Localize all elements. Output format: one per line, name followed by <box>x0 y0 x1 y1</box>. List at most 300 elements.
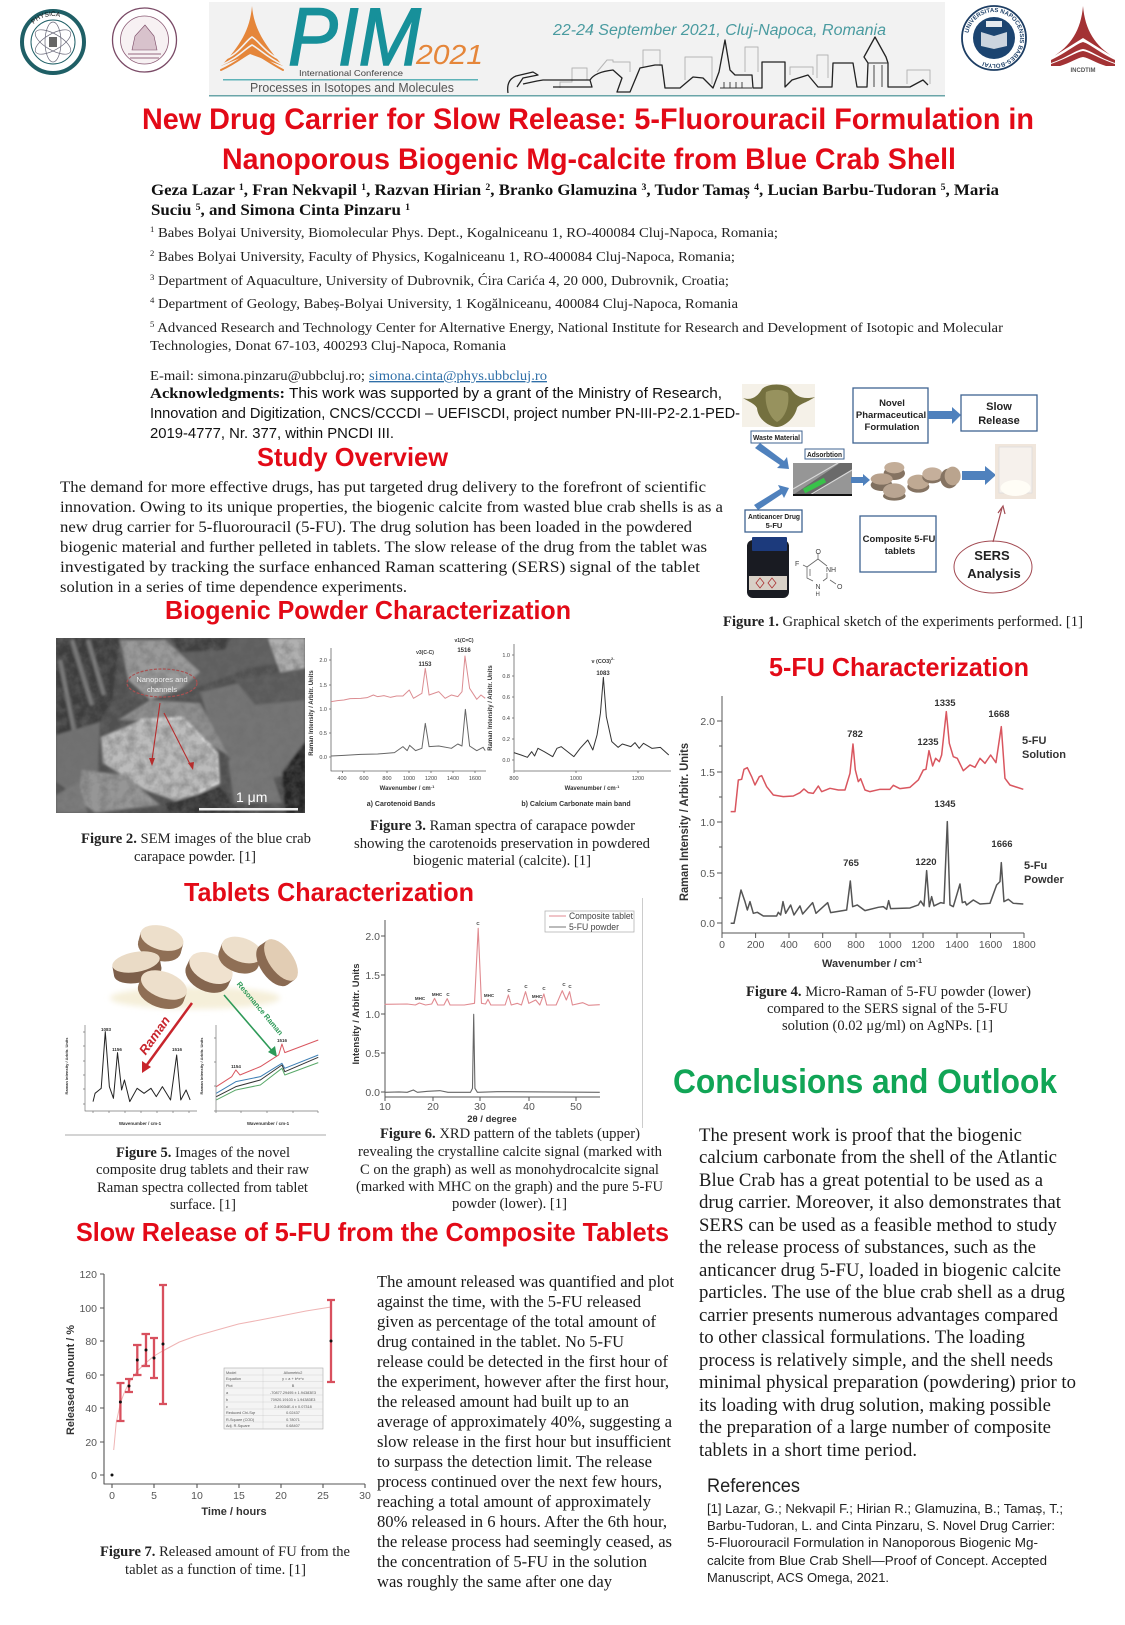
caption: figure 5: Figure 5. Images of the novel <box>116 1145 290 1161</box>
figure 3a: carotenoid Raman chart: 1600 <box>469 776 481 782</box>
banner text: 2021: 2021 <box>415 39 483 70</box>
heading: 5-FU Characterization: 5-FU Characterization <box>769 652 1029 682</box>
table: fit parameters <box>224 1368 323 1429</box>
affiliations: 5 <box>150 320 154 329</box>
figure 7: release chart: 40 <box>85 1403 97 1415</box>
image: SEM with green drug rod <box>793 463 852 496</box>
logo: Physica: PHYSICA <box>31 11 60 24</box>
text: study overview paragraph: new drug carrier for 5-fluorouracil (5-FU). The drug solution has been loaded in the powdered <box>60 519 692 536</box>
authors: 5 <box>196 202 201 212</box>
figure 4: 5-FU Raman chart: 1400 <box>945 939 969 951</box>
figure 6: XRD chart: C <box>507 988 511 993</box>
figure 3a: carotenoid Raman chart: 1000 <box>403 776 415 782</box>
figure 4: 5-FU Raman chart: 765 <box>843 858 860 869</box>
caption: figure 4: compared to the SERS signal of the 5-FU <box>767 1001 1009 1017</box>
chart: tablet Raman spectrum: Wavenumber / cm-1 <box>119 1121 162 1126</box>
logo: INCDTIM <box>1051 6 1115 74</box>
text: conclusions paragraph: calcium carbonate from the shell of the Atlantic <box>699 1148 1057 1168</box>
title <box>142 103 1034 176</box>
authors: 1 <box>405 202 411 212</box>
figure 3a: carotenoid Raman chart: ν1(C=C) <box>454 638 474 644</box>
figure 6: XRD chart: MHC <box>532 994 543 999</box>
figure 6: XRD chart: MHC <box>432 992 443 997</box>
text: study overview paragraph: The demand for more effective drugs, has put targeted drug delivery to the forefront of scientific <box>60 479 706 496</box>
figure 3a: carotenoid Raman chart: 1.0 <box>319 707 327 713</box>
figure 4: 5-FU Raman chart: 1000 <box>878 939 902 951</box>
box: Composite 5-FU tablets: tablets <box>885 546 915 557</box>
box: Novel Pharmaceutical Formulation: Pharmaceutical <box>856 410 926 421</box>
figure 3b: calcium carbonate chart: 1200 <box>632 776 644 782</box>
callout: nanopores label: Nanopores and <box>136 675 188 684</box>
figure 7: release chart <box>65 1269 371 1518</box>
figure 4: 5-FU Raman chart: 1600 <box>979 939 1002 951</box>
chart: resonance Raman spectra: Raman Intensity / Arbitr. Units <box>199 1037 204 1094</box>
text: reference list: Barbu-Tudoran, L. and Cinta Pinzaru, S. Novel Drug Carrier: <box>707 1518 1055 1533</box>
heading: Slow Release: Slow Release of 5-FU from the Composite Tablets <box>76 1217 669 1247</box>
caption: figure 6: revealing the crystalline calcite signal (marked with <box>358 1144 663 1160</box>
figure 4: 5-FU Raman chart: 1.5 <box>700 767 715 779</box>
text: conclusions paragraph <box>699 1126 1076 1461</box>
box: Adsorbtion: Adsorbtion <box>807 452 842 459</box>
figure 3b: calcium carbonate chart: 1000 <box>570 776 582 782</box>
caption: figure 5: surface. [1] <box>170 1197 236 1213</box>
box: Slow Release: Release <box>978 415 1020 427</box>
text: conclusions paragraph: particles. The use of the blue crab shell as a drug <box>699 1283 1065 1303</box>
figure 4: 5-FU Raman chart: 1.0 <box>700 817 715 829</box>
text: release description: slow release in the first hour but insufficient <box>377 1432 671 1451</box>
text: release description <box>377 1272 674 1591</box>
series: 5-FU powder <box>731 822 1023 923</box>
box: Novel Pharmaceutical Formulation <box>853 388 928 443</box>
figure 4: 5-FU Raman chart: 5-FU <box>1022 735 1046 747</box>
figure 6: XRD chart: 1.5 <box>365 970 380 982</box>
figure 3a: carotenoid Raman chart: 600 <box>359 776 369 782</box>
figure 3a: carotenoid Raman chart: 1153 <box>418 662 432 668</box>
text: conclusions paragraph: SERS can be used as a feasible method to study <box>699 1216 1058 1236</box>
figure 6: XRD chart: 2.0 <box>365 931 380 943</box>
affiliations: Technologies, Donat 67-103, 400293 Cluj-Napoca, Romania <box>150 338 506 353</box>
caption: figure 7 <box>100 1544 350 1578</box>
figure 6: XRD chart <box>351 898 642 1128</box>
figure 4: 5-FU Raman chart <box>679 696 1066 970</box>
contact email: E-mail: simona.pinzaru@ubbcluj.ro; <box>150 368 365 383</box>
figure 4: 5-FU Raman chart: 1220 <box>915 857 937 868</box>
caption: figure 3: showing the carotenoids preservation in powdered <box>354 836 651 852</box>
figure 3b: calcium carbonate chart: Raman Intensity / Arbitr. Units <box>488 665 494 751</box>
authors: Suciu <box>151 202 188 219</box>
affiliations: Department of Geology, Babeș-Bolyai University, 1 Kogălniceanu, 400084 Cluj-Napoca, Romania <box>154 296 738 311</box>
affiliations <box>150 225 1004 353</box>
authors: 1 <box>361 182 367 192</box>
table: fit parameters: Adj. R-Square <box>226 1424 250 1428</box>
caption: figure 3: Figure 3. Raman spectra of carapace powder <box>370 818 635 834</box>
authors: 3 <box>641 182 647 192</box>
figure 3b: calcium carbonate chart: -1 <box>616 784 620 789</box>
title: Nanoporous Biogenic Mg-calcite from Blue Crab Shell <box>222 143 956 176</box>
text: conclusions paragraph: anticancer drug 5-FU, loaded in biogenic calcite <box>699 1261 1061 1281</box>
arrow: SERS to jar <box>993 506 1005 542</box>
text: conclusions paragraph: drug carrier. Moreover, it also demonstrates that <box>699 1193 1062 1213</box>
series: fit curve <box>114 1307 331 1450</box>
series: error bars <box>116 1285 335 1421</box>
figure 6: XRD chart: 10 <box>379 1101 391 1113</box>
figure 4: 5-FU Raman chart: 800 <box>847 939 865 951</box>
text: conclusions paragraph: minimal physical preparation (powdering) prior to <box>699 1373 1076 1393</box>
banner icon: orange tent <box>221 6 283 70</box>
caption: figure 7: tablet as a function of time. [1] <box>125 1562 306 1578</box>
figure 4: 5-FU Raman chart: 1345 <box>934 799 956 810</box>
figure 3b: calcium carbonate chart: 0.0 <box>502 758 510 764</box>
contact email <box>150 368 547 383</box>
table: fit parameters: 70920.19103 ± 1.94383E3 <box>271 1398 315 1402</box>
caption: figure 4: solution (0.02 μg/ml) on AgNPs. [1] <box>782 1018 993 1034</box>
figure 7: release chart: 120 <box>79 1269 97 1281</box>
text: release description: reaching a total amount of approximately <box>377 1492 652 1511</box>
figure 3a: carotenoid Raman chart: 400 <box>337 776 347 782</box>
contact email: simona.cinta@phys.ubbcluj.ro <box>369 368 547 383</box>
text: conclusions paragraph: carrier presents numerous advantages compared <box>699 1306 1059 1326</box>
acknowledgments: This work was supported by a grant of the Ministry of Research, <box>289 386 722 402</box>
text: study overview paragraph: investigated by tracking the surface enhanced Raman scattering (SERS) signal of the tablet <box>60 559 701 576</box>
caption: figure 5: composite drug tablets and their raw <box>96 1162 310 1178</box>
text: release description: drug contained in the tablet. No 5-FU <box>377 1332 624 1351</box>
figure 7: release chart: 25 <box>317 1490 329 1502</box>
figure 4: 5-FU Raman chart: Powder <box>1024 874 1064 886</box>
banner text: International Conference: International Conference <box>299 68 403 78</box>
figure 5: tablets and Raman spectra <box>64 921 318 1126</box>
figure 6: XRD chart: MHC <box>415 996 426 1001</box>
table: fit parameters: Equation <box>226 1377 241 1381</box>
text: release description: given as percentage of the total amount of <box>377 1312 656 1331</box>
figure 4: 5-FU Raman chart: 200 <box>747 939 765 951</box>
title: New Drug Carrier for Slow Release: 5-Fluorouracil Formulation in <box>142 103 1034 136</box>
figure 7: release chart: Time / hours <box>201 1506 267 1518</box>
table: fit parameters: Reduced Chi-Sqr <box>226 1411 256 1415</box>
caption: figure 2: Figure 2. SEM images of the blue crab <box>81 831 311 847</box>
figure 3b: calcium carbonate chart: 800 <box>509 776 519 782</box>
table: fit parameters: R-Square (COD) <box>226 1418 255 1422</box>
arrow: waste to adsorption <box>755 443 789 469</box>
banner text: Processes in Isotopes and Molecules: Processes in Isotopes and Molecules <box>250 81 454 95</box>
box: Slow Release: Slow <box>986 401 1012 413</box>
figure 6: XRD chart: 2θ / degree <box>467 1114 517 1125</box>
heading: Study Overview: Study Overview <box>257 442 449 472</box>
series: data points <box>110 1340 332 1476</box>
chart: resonance Raman spectra <box>199 1025 318 1126</box>
table: fit parameters: b <box>226 1398 228 1402</box>
text: release description: the experiment, however after the first hour, <box>377 1372 669 1391</box>
image: composite tablets <box>871 462 961 501</box>
figure 3a: carotenoid Raman chart: 0.5 <box>319 731 327 737</box>
diagram: 5-FU chemical structure: H <box>816 592 820 598</box>
figure 6: XRD chart: 40 <box>523 1101 535 1113</box>
text: study overview paragraph: biogenic material and further pelleted in tablets. The slow release of the drug from the tablet was <box>60 539 707 556</box>
figure 6: XRD chart: 50 <box>570 1101 582 1113</box>
affiliations: Advanced Research and Technology Center for Alternative Energy, National Institute for Research and Development of Isotopic and Molecular <box>154 320 1004 335</box>
callout: SERS Analysis: Analysis <box>967 566 1021 581</box>
figure 6: XRD chart: C <box>542 986 546 991</box>
figure 4: 5-FU Raman chart: Raman Intensity / Arbitr. Units <box>679 743 691 901</box>
figure 3b: calcium carbonate chart: 2- <box>611 656 615 661</box>
text: release description: the release process had seemingly ceased, as <box>377 1532 672 1551</box>
figure 4: 5-FU Raman chart: 1335 <box>934 698 956 709</box>
heading: References: References <box>707 1476 800 1497</box>
authors: 2 <box>485 182 491 192</box>
callout: SERS Analysis <box>954 541 1032 593</box>
box: Anticancer Drug 5-FU <box>745 510 802 532</box>
authors: , Branko Glamuzina <box>490 182 641 199</box>
figure 3a: carotenoid Raman chart <box>309 638 486 808</box>
legend <box>545 911 634 932</box>
text: release description: against the time, with the 5-FU released <box>377 1292 642 1311</box>
caption: figure 4: Figure 4. Micro-Raman of 5-FU powder (lower) <box>746 984 1031 1000</box>
series: 5-FU solution <box>731 712 1023 812</box>
authors: Geza Lazar <box>151 182 228 199</box>
authors: , Razvan Hirian <box>366 182 485 199</box>
figure 6: XRD chart: C <box>568 984 572 989</box>
heading: Tablets Characterization: Tablets Characterization <box>184 877 474 907</box>
chart: resonance Raman spectra: 1154 <box>231 1064 241 1069</box>
figure 1: graphical sketch <box>742 384 1037 598</box>
diagram: 5-FU chemical structure: N <box>816 584 821 591</box>
figure 3a: carotenoid Raman chart: 1.5 <box>319 683 327 689</box>
figure 4: 5-FU Raman chart: 1668 <box>988 709 1010 720</box>
caption: figure 5 <box>96 1145 310 1213</box>
text: conclusions paragraph: Blue Crab has a great potential to be used as a <box>699 1171 1043 1191</box>
table: fit parameters: 0.78071 <box>286 1418 300 1422</box>
arrow: Resonance Raman <box>224 980 285 1057</box>
text: conclusions paragraph: to other classical formulations. The loading <box>699 1328 1025 1348</box>
box: Waste Material <box>751 431 802 443</box>
text: release description: average of approximately 40%, suggesting a <box>377 1412 673 1431</box>
chart: tablet Raman spectrum: Raman Intensity / Arbitr. Units <box>64 1037 69 1094</box>
figure 3b: calcium carbonate chart: b) Calcium Carbonate main band <box>521 801 631 808</box>
chart: tablet Raman spectrum: 1156 <box>112 1047 122 1052</box>
caption: figure 2 <box>81 831 311 865</box>
arrow: Raman: Raman <box>136 1013 173 1057</box>
scale bar <box>199 789 298 810</box>
diagram: 5-FU chemical structure: F <box>795 561 799 568</box>
figure 3a: carotenoid Raman chart: ν3(C-C) <box>416 650 434 656</box>
figure 7: release chart: 20 <box>85 1437 97 1449</box>
figure 4: 5-FU Raman chart: 600 <box>814 939 832 951</box>
figure 6: XRD chart: Intensity / Arbitr. Units <box>351 964 362 1064</box>
affiliations: 3 <box>150 273 154 282</box>
text: study overview paragraph: innovation. Owing to its unique properties, the biogenic calcite from wasted blue crab shells is as a <box>60 499 723 516</box>
caption: figure 6: Figure 6. XRD pattern of the tablets (upper) <box>380 1126 640 1142</box>
caption: figure 5: Raman spectra collected from tablet <box>97 1180 308 1196</box>
box: Anticancer Drug 5-FU: 5-FU <box>766 521 782 530</box>
affiliations: 2 <box>150 249 154 258</box>
text: conclusions paragraph: tablets in a short time period. <box>699 1441 917 1461</box>
figure 4: 5-FU Raman chart: 0.0 <box>700 918 715 930</box>
text: release description: process continued over the next few hours, <box>377 1472 662 1491</box>
figure 7: release chart: 5 <box>151 1490 157 1502</box>
text: reference list: calcite from Blue Crab Shell—Proof of Concept. Accepted <box>707 1553 1047 1568</box>
text: release description: release could be detected in the first hour of <box>377 1352 668 1371</box>
figure 7: release chart: 10 <box>191 1490 203 1502</box>
chart: tablet Raman spectrum <box>64 1025 197 1126</box>
diagram: 5-FU chemical structure <box>795 549 843 598</box>
heading: Conclusions and Outlook: Conclusions and Outlook <box>673 1063 1057 1101</box>
authors <box>151 182 999 219</box>
figure 7: release chart: 20 <box>275 1490 287 1502</box>
figure 4: 5-FU Raman chart: 2.0 <box>700 716 715 728</box>
box: Composite 5-FU tablets <box>860 516 936 572</box>
box: Novel Pharmaceutical Formulation: Formulation <box>865 422 920 433</box>
authors: 5 <box>941 182 946 192</box>
figure 6: XRD chart: C <box>562 982 566 987</box>
figure 4: 5-FU Raman chart: 1235 <box>917 737 939 748</box>
figure 3a: carotenoid Raman chart: Wavenumber / cm <box>380 786 431 792</box>
acknowledgments: 2019-4777, Nr. 377, within PNCDI III. <box>150 426 394 442</box>
authors: , Fran Nekvapil <box>244 182 361 199</box>
text: reference list <box>707 1501 1063 1585</box>
caption: figure 6 <box>356 1126 664 1212</box>
box: Novel Pharmaceutical Formulation: Novel <box>879 398 905 409</box>
figure 4: 5-FU Raman chart: Solution <box>1022 749 1066 761</box>
figure 6: XRD chart: 0.5 <box>365 1048 380 1060</box>
figure 3a: carotenoid Raman chart: 1400 <box>447 776 459 782</box>
text: release description: to surpass the detection limit. The release <box>377 1452 652 1471</box>
arrow: Resonance Raman: Resonance Raman <box>235 980 285 1037</box>
acknowledgments <box>150 386 740 442</box>
affiliations: 1 <box>150 225 154 234</box>
header logos and banner <box>20 0 1115 96</box>
arrow: drug to adsorption <box>754 485 789 510</box>
chart: resonance Raman spectra: Wavenumber / cm-1 <box>247 1121 290 1126</box>
figure 6: XRD chart: C <box>476 921 480 926</box>
text: study overview paragraph: solution in a series of time dependence experiments. <box>60 579 407 596</box>
chart: tablet Raman spectrum: 1083 <box>101 1027 112 1032</box>
affiliations: Babes Bolyai University, Faculty of Physics, Kogalniceanu 1, RO-400084 Cluj-Napoca, Romania; <box>154 249 735 264</box>
banner <box>209 0 945 96</box>
text: conclusions paragraph: process is relatively simple, and the shell needs <box>699 1351 1053 1371</box>
figure 4: 5-FU Raman chart: 5-Fu <box>1024 860 1047 872</box>
figure 4: 5-FU Raman chart: -1 <box>916 958 922 965</box>
figure 3a: carotenoid Raman chart: Raman Intensity / Arbitr. Units <box>309 670 315 756</box>
figure 3a: carotenoid Raman chart: 800 <box>382 776 392 782</box>
text: release description: 80% released in 6 hours. After the 6th hour, <box>377 1512 667 1531</box>
figure 4: 5-FU Raman chart: 400 <box>780 939 798 951</box>
box: Adsorbtion <box>805 449 844 459</box>
text: conclusions paragraph: The present work is proof that the biogenic <box>699 1126 1022 1146</box>
figure 3a: carotenoid Raman chart: 1200 <box>425 776 437 782</box>
figure 4: 5-FU Raman chart: 1800 <box>1012 939 1036 951</box>
caption: figure 6: C on the graph) as well as monohydrocalcite signal <box>360 1162 659 1178</box>
figure 4: 5-FU Raman chart: 0 <box>719 939 725 951</box>
caption: figure 7: Figure 7. Released amount of FU from the <box>100 1544 350 1560</box>
legend: 5-FU powder <box>569 922 619 932</box>
figure 7: release chart: 80 <box>85 1336 97 1348</box>
figure 3b: calcium carbonate chart: ν (CO3) <box>591 659 611 665</box>
box: Anticancer Drug 5-FU: Anticancer Drug <box>748 512 800 521</box>
arrow: tablets to jar <box>962 466 996 485</box>
arrow: Raman <box>136 1003 192 1073</box>
table: fit parameters: 0.68407 <box>286 1424 300 1428</box>
figure 7: release chart: 0 <box>109 1490 115 1502</box>
banner illustration: Cluj skyline <box>508 37 930 93</box>
box: Composite 5-FU tablets: Composite 5-FU <box>863 534 936 545</box>
text: reference list: 5-Fluorouracil Formulation in Nanoporous Biogenic Mg- <box>707 1535 1038 1550</box>
figure 4: 5-FU Raman chart: 0.5 <box>700 868 715 880</box>
logo: Babes-Bolyai University: UNIVERSITAS NAPOCENSIS BABES-BOLYAI <box>964 8 1024 68</box>
figure 4: 5-FU Raman chart: Wavenumber / cm <box>822 958 916 970</box>
box: Slow Release <box>961 395 1037 431</box>
authors: , Lucian Barbu-Tudoran <box>759 182 941 199</box>
figure 3a: carotenoid Raman chart: a) Carotenoid Bands <box>367 801 435 808</box>
table: fit parameters: Plot <box>226 1384 233 1388</box>
figure 7: release chart: 15 <box>233 1490 245 1502</box>
figure 6: XRD chart: 30 <box>474 1101 486 1113</box>
caption: figure 2: carapace powder. [1] <box>134 849 256 865</box>
figure 7: release chart: 0 <box>91 1470 97 1482</box>
chart: resonance Raman spectra: 1516 <box>277 1038 288 1043</box>
affiliations: Babes Bolyai University, Biomolecular Phys. Dept., Kogalniceanu 1, RO-400084 Cluj-Napoca, Romania; <box>154 225 778 240</box>
table: fit parameters: B <box>292 1384 295 1388</box>
figure 3b: calcium carbonate chart: 0.2 <box>502 737 510 743</box>
figure 4: 5-FU Raman chart: 1200 <box>911 939 935 951</box>
table: fit parameters: 0.02437 <box>286 1411 300 1415</box>
figure 3b: calcium carbonate chart: 0.4 <box>502 716 510 722</box>
figure 6: XRD chart: 1.0 <box>365 1009 380 1021</box>
authors: , and Simona Cinta Pinzaru <box>201 202 405 219</box>
table: fit parameters: y = a + b*x^c <box>282 1377 304 1381</box>
authors: , Maria <box>945 182 999 199</box>
figure 7: release chart: 30 <box>359 1490 371 1502</box>
scale bar: 1 μm <box>236 789 267 805</box>
acknowledgments: Acknowledgments: <box>150 386 285 402</box>
box: Waste Material: Waste Material <box>753 433 800 442</box>
caption: figure 3 <box>354 818 651 869</box>
acknowledgments: Innovation and Digitization, CNCS/CCCDI – UEFISCDI, project number PN-III-P2-2.1-PED- <box>150 406 740 422</box>
text: release description: the released amount had built up to an <box>377 1392 630 1411</box>
figure 4: 5-FU Raman chart: 1666 <box>991 839 1013 850</box>
image: drug bottle <box>747 537 789 598</box>
caption: figure 3: biogenic material (calcite). [1] <box>413 853 591 869</box>
text: conclusions paragraph: its loading with drug solution, making possible <box>699 1396 1051 1416</box>
figure 6: XRD chart: 20 <box>427 1101 439 1113</box>
figure 3b: calcium carbonate chart: 1.0 <box>502 653 510 659</box>
table: fit parameters: Model <box>226 1371 236 1375</box>
figure 3a: carotenoid Raman chart: -1 <box>431 784 435 789</box>
chart: tablet Raman spectrum: 1516 <box>172 1047 183 1052</box>
figure 3b: calcium carbonate chart: 0.6 <box>502 695 510 701</box>
diagram: 5-FU chemical structure: NH <box>826 567 836 574</box>
affiliations: Department of Aquaculture, University of Dubrovnik, Ćira Carića 4, 20 000, Dubrovnik, Croatia; <box>154 273 729 288</box>
affiliations: 4 <box>150 296 154 305</box>
table: fit parameters: Allometric2 <box>284 1371 302 1375</box>
text: study overview paragraph <box>60 479 723 596</box>
caption: figure 6: (marked with MHC on the graph) and the pure 5-FU <box>356 1179 664 1195</box>
text: release description: The amount released was quantified and plot <box>377 1272 674 1291</box>
logo: faculty seal <box>112 8 176 72</box>
authors: 1 <box>239 182 244 192</box>
logo: Physica <box>20 9 86 75</box>
image: composite tablets <box>110 921 305 1015</box>
figure 4: 5-FU Raman chart: 782 <box>847 729 863 740</box>
table: fit parameters: a <box>226 1391 229 1395</box>
arrow: formulation to slow release <box>928 407 961 424</box>
figure 7: release chart: Released Amount / % <box>65 1325 77 1435</box>
table: fit parameters: 2.49034E-4 ± 0.07318 <box>274 1405 312 1409</box>
figure 3a: carotenoid Raman chart: 1516 <box>457 648 471 654</box>
diagram: 5-FU chemical structure: O <box>837 584 843 591</box>
table: fit parameters: c <box>226 1405 228 1409</box>
icon: crab carapace <box>742 384 815 427</box>
logo: INCDTIM: INCDTIM <box>1070 68 1096 74</box>
figure 3a: carotenoid Raman chart: 2.0 <box>319 658 327 664</box>
